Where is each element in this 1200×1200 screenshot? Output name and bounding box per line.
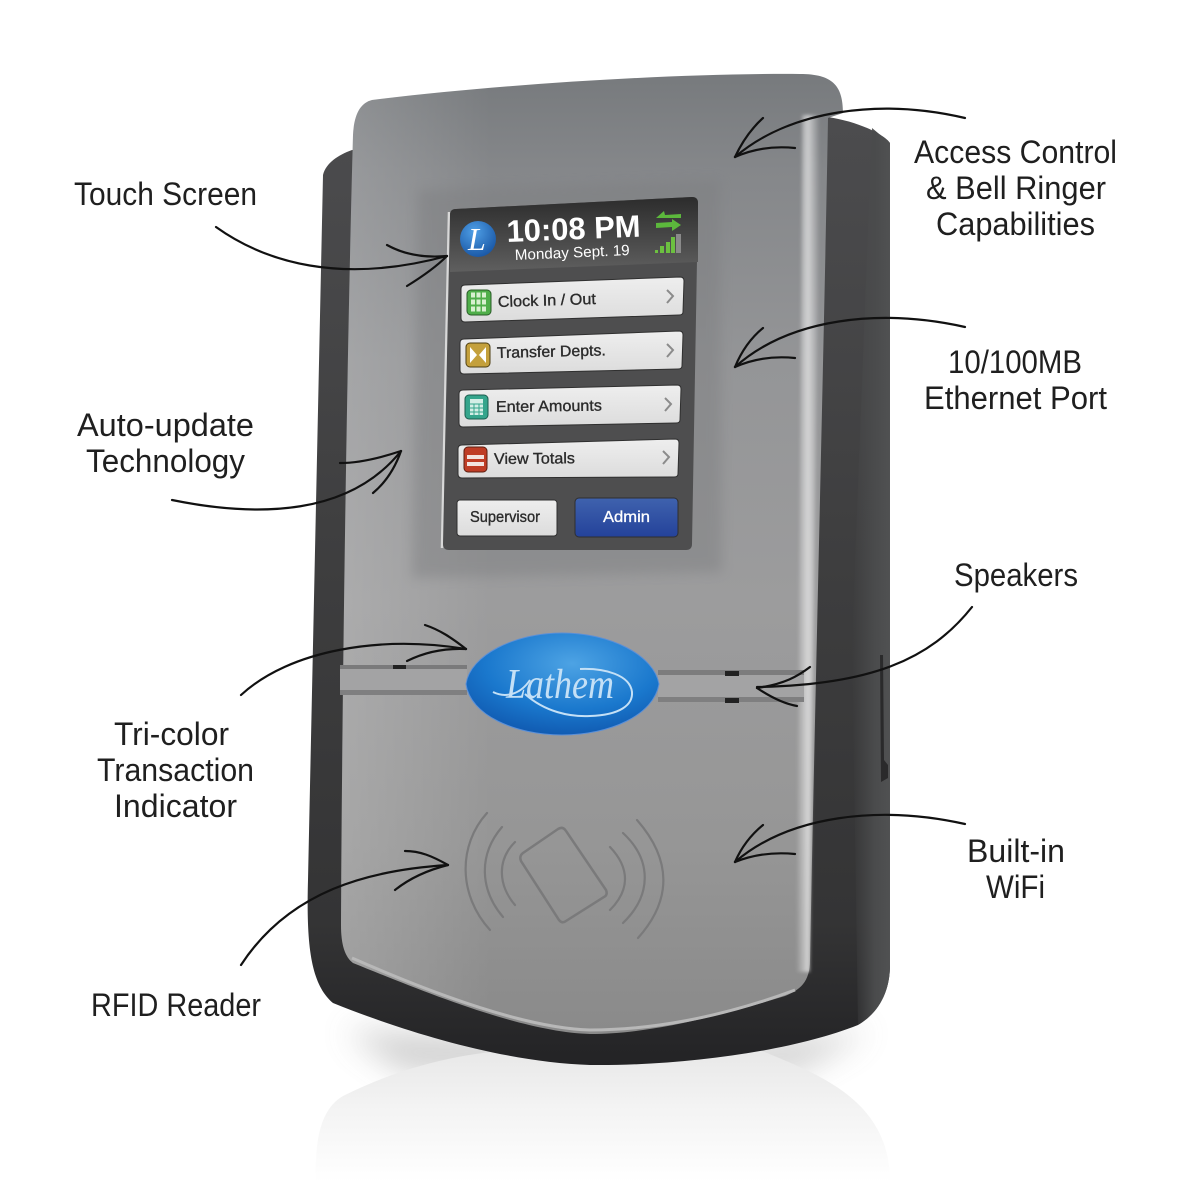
side seam of body	[852, 128, 890, 1025]
screen recess	[412, 180, 722, 578]
label: Access Control & Bell Ringer Capabilities: Access Control	[914, 134, 1117, 170]
icon: Lathem L badge: L	[467, 221, 486, 257]
label: RFID Reader: RFID Reader	[91, 987, 261, 1023]
icon: RFID card and waves	[466, 813, 663, 938]
arrow: Access Control	[735, 109, 965, 157]
engraved card	[520, 828, 607, 922]
icon: signal bars	[655, 234, 681, 253]
touch screen	[442, 197, 698, 550]
left face sheen	[341, 74, 843, 1034]
arrow: Built-in WiFi	[735, 815, 965, 862]
label: Built-in WiFi	[967, 833, 1065, 905]
button: View Totals	[458, 439, 679, 478]
label: Tri-color Transaction Indicator: Indicator	[114, 788, 237, 824]
button: Transfer Depts.: Transfer Depts.	[497, 342, 606, 362]
button: Clock In / Out: Clock In / Out	[498, 291, 597, 311]
label: Built-in WiFi: WiFi	[986, 869, 1045, 905]
label: Access Control & Bell Ringer Capabilities	[914, 134, 1117, 242]
reflection under device	[316, 1050, 890, 1182]
arrow: RFID Reader	[241, 851, 448, 965]
label: 10/100MB Ethernet Port: 10/100MB	[948, 344, 1082, 380]
button: View Totals: View Totals	[494, 450, 575, 468]
label: Tri-color Transaction Indicator: Transaction	[97, 752, 254, 788]
device housing	[308, 74, 890, 1065]
arrow: Ethernet Port	[735, 318, 965, 367]
icon: Lathem L badge	[460, 221, 496, 257]
silver front face	[341, 74, 843, 1034]
label: Touch Screen: Touch Screen	[74, 176, 257, 212]
left waves	[466, 813, 515, 930]
label: Auto-update Technology: Auto-update	[77, 407, 254, 443]
button: Supervisor	[457, 500, 557, 536]
side slot	[880, 655, 888, 782]
button: Enter Amounts: Enter Amounts	[496, 398, 602, 416]
label: Speakers: Speakers	[954, 557, 1078, 593]
label: Auto-update Technology	[77, 407, 254, 479]
icon: red totals	[464, 447, 487, 472]
label: Tri-color Transaction Indicator	[97, 716, 254, 824]
screen header bar	[450, 197, 698, 272]
clock time: 10:08 PM	[506, 209, 641, 249]
button: Transfer Depts.	[460, 331, 683, 374]
speaker and indicator strips	[340, 665, 804, 703]
dark rear body	[308, 117, 890, 1065]
lower bevel of face	[352, 958, 795, 1030]
arrow: Auto-update	[172, 451, 401, 510]
label: Auto-update Technology: Technology	[86, 443, 245, 479]
button: Supervisor: Supervisor	[470, 509, 540, 526]
icon: network status arrows	[656, 211, 681, 231]
label: 10/100MB Ethernet Port: Ethernet Port	[924, 380, 1107, 416]
label: Tri-color Transaction Indicator: Tri-color	[114, 716, 229, 752]
Lathem logo badge	[466, 633, 659, 735]
right edge highlight	[796, 115, 820, 972]
icon: teal calculator	[465, 395, 488, 419]
clock date: Monday Sept. 19	[514, 242, 630, 264]
screen edge highlight	[442, 212, 449, 548]
button: Admin	[575, 498, 678, 537]
arrow: Touch Screen	[216, 227, 447, 286]
floor shadow under device	[345, 1030, 870, 1080]
label: Access Control & Bell Ringer Capabilities: Capabilities	[936, 206, 1095, 242]
arrow: Tri-color indicator	[241, 625, 466, 695]
label: Access Control & Bell Ringer Capabilities: & Bell Ringer	[926, 170, 1106, 206]
button: Enter Amounts	[459, 385, 681, 427]
icon: green grid	[467, 290, 491, 315]
arrow: Speakers	[757, 607, 972, 706]
screen panel	[443, 197, 698, 550]
Lathem logo badge: Lathem	[505, 662, 614, 708]
label: 10/100MB Ethernet Port	[924, 344, 1107, 416]
right waves	[610, 820, 663, 938]
button: Admin: Admin	[603, 509, 650, 526]
icon: gold transfer	[466, 343, 490, 367]
label: Built-in WiFi: Built-in	[967, 833, 1065, 869]
button: Clock In / Out	[461, 277, 684, 322]
